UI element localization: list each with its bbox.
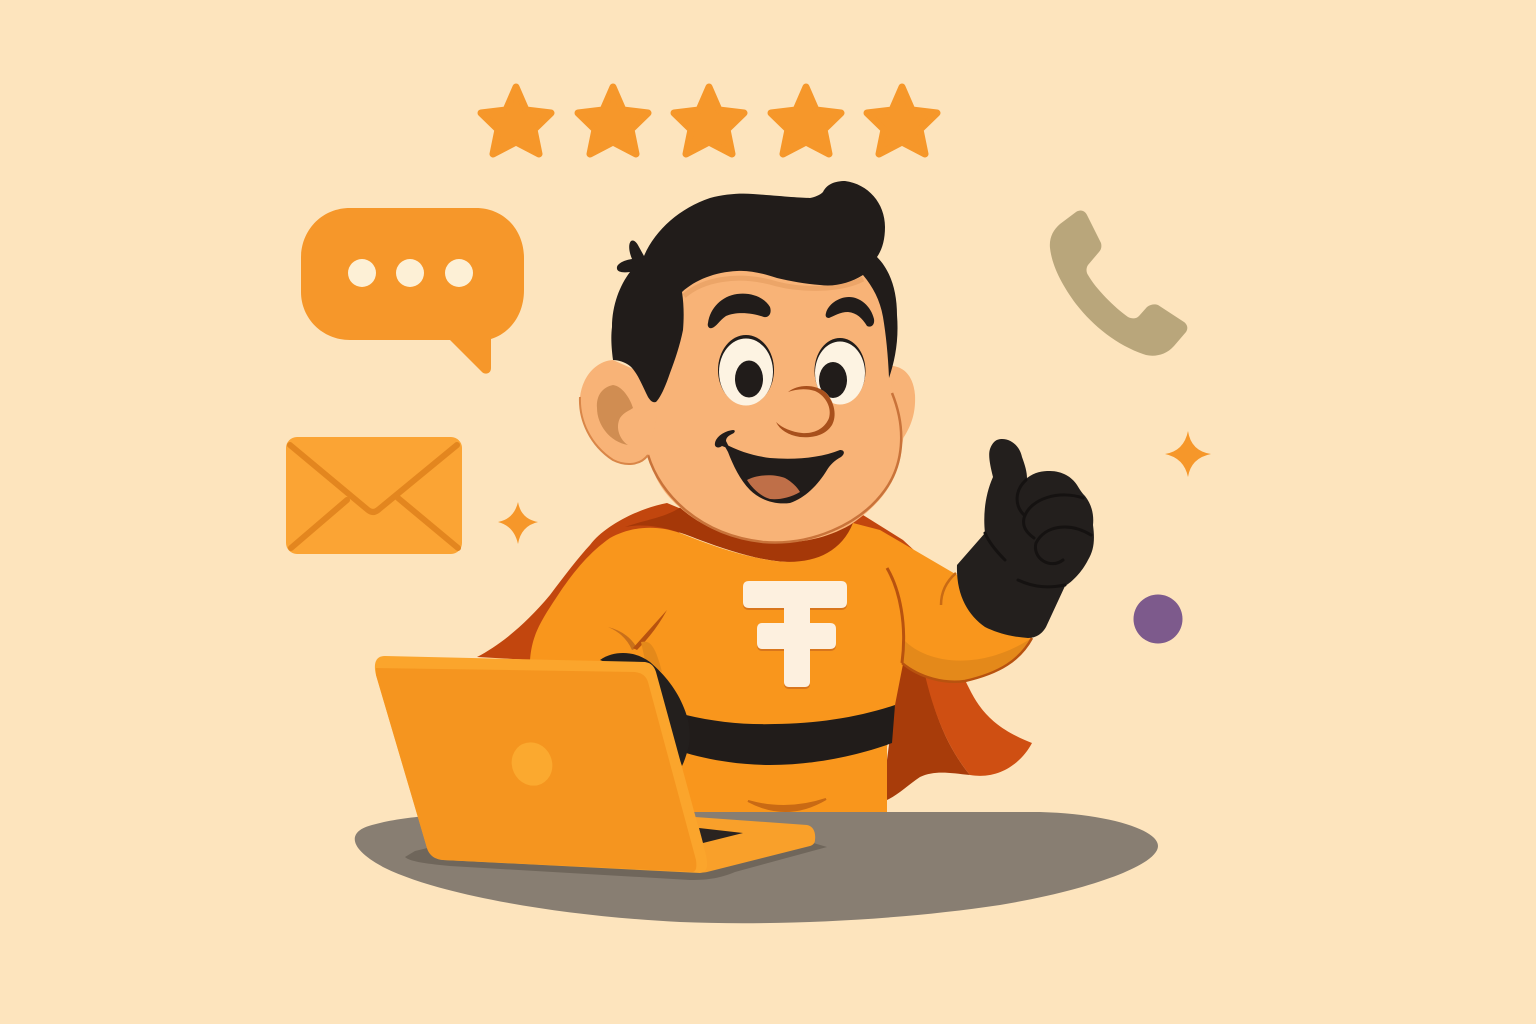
left ear — [580, 360, 657, 464]
chin and jaw contour — [648, 393, 901, 542]
keyboard gap — [699, 828, 743, 843]
right ear — [885, 366, 915, 440]
eyebrows — [708, 294, 874, 328]
laptop shadow — [405, 842, 827, 880]
waist crease — [748, 799, 826, 811]
laptop logo — [505, 736, 559, 792]
icon: purple dot — [1134, 594, 1182, 644]
chest to arm fold — [887, 568, 904, 663]
icon: phone handset — [1050, 211, 1187, 356]
hair — [611, 181, 898, 402]
laptop lid — [375, 656, 707, 873]
cape — [477, 503, 1032, 800]
collar band — [625, 500, 853, 562]
cape lower right light — [925, 675, 1032, 776]
icon: sparkle right — [1165, 431, 1211, 477]
head — [635, 265, 904, 543]
belt — [686, 705, 895, 765]
hairline shadow — [684, 278, 863, 296]
icon: sparkle left — [498, 502, 538, 544]
arm shading — [902, 638, 1032, 682]
cape lower right dark — [887, 660, 970, 800]
icon: speech bubble — [301, 208, 524, 374]
mouth — [715, 430, 844, 503]
cape left side — [477, 503, 720, 660]
five star rating — [481, 87, 937, 154]
cape shoulder right — [840, 515, 930, 565]
underarm folds — [608, 627, 637, 650]
icon: envelope — [286, 437, 462, 554]
raised black glove with thumb up — [957, 439, 1094, 638]
eyes — [718, 335, 866, 406]
laptop — [375, 653, 827, 880]
chest emblem — [743, 581, 847, 689]
laptop base — [695, 817, 815, 873]
glove finger lines — [985, 480, 1091, 587]
nose — [776, 386, 835, 438]
body suit — [530, 523, 1032, 812]
desk shadow ellipse — [355, 812, 1158, 923]
glove on laptop — [600, 653, 690, 766]
